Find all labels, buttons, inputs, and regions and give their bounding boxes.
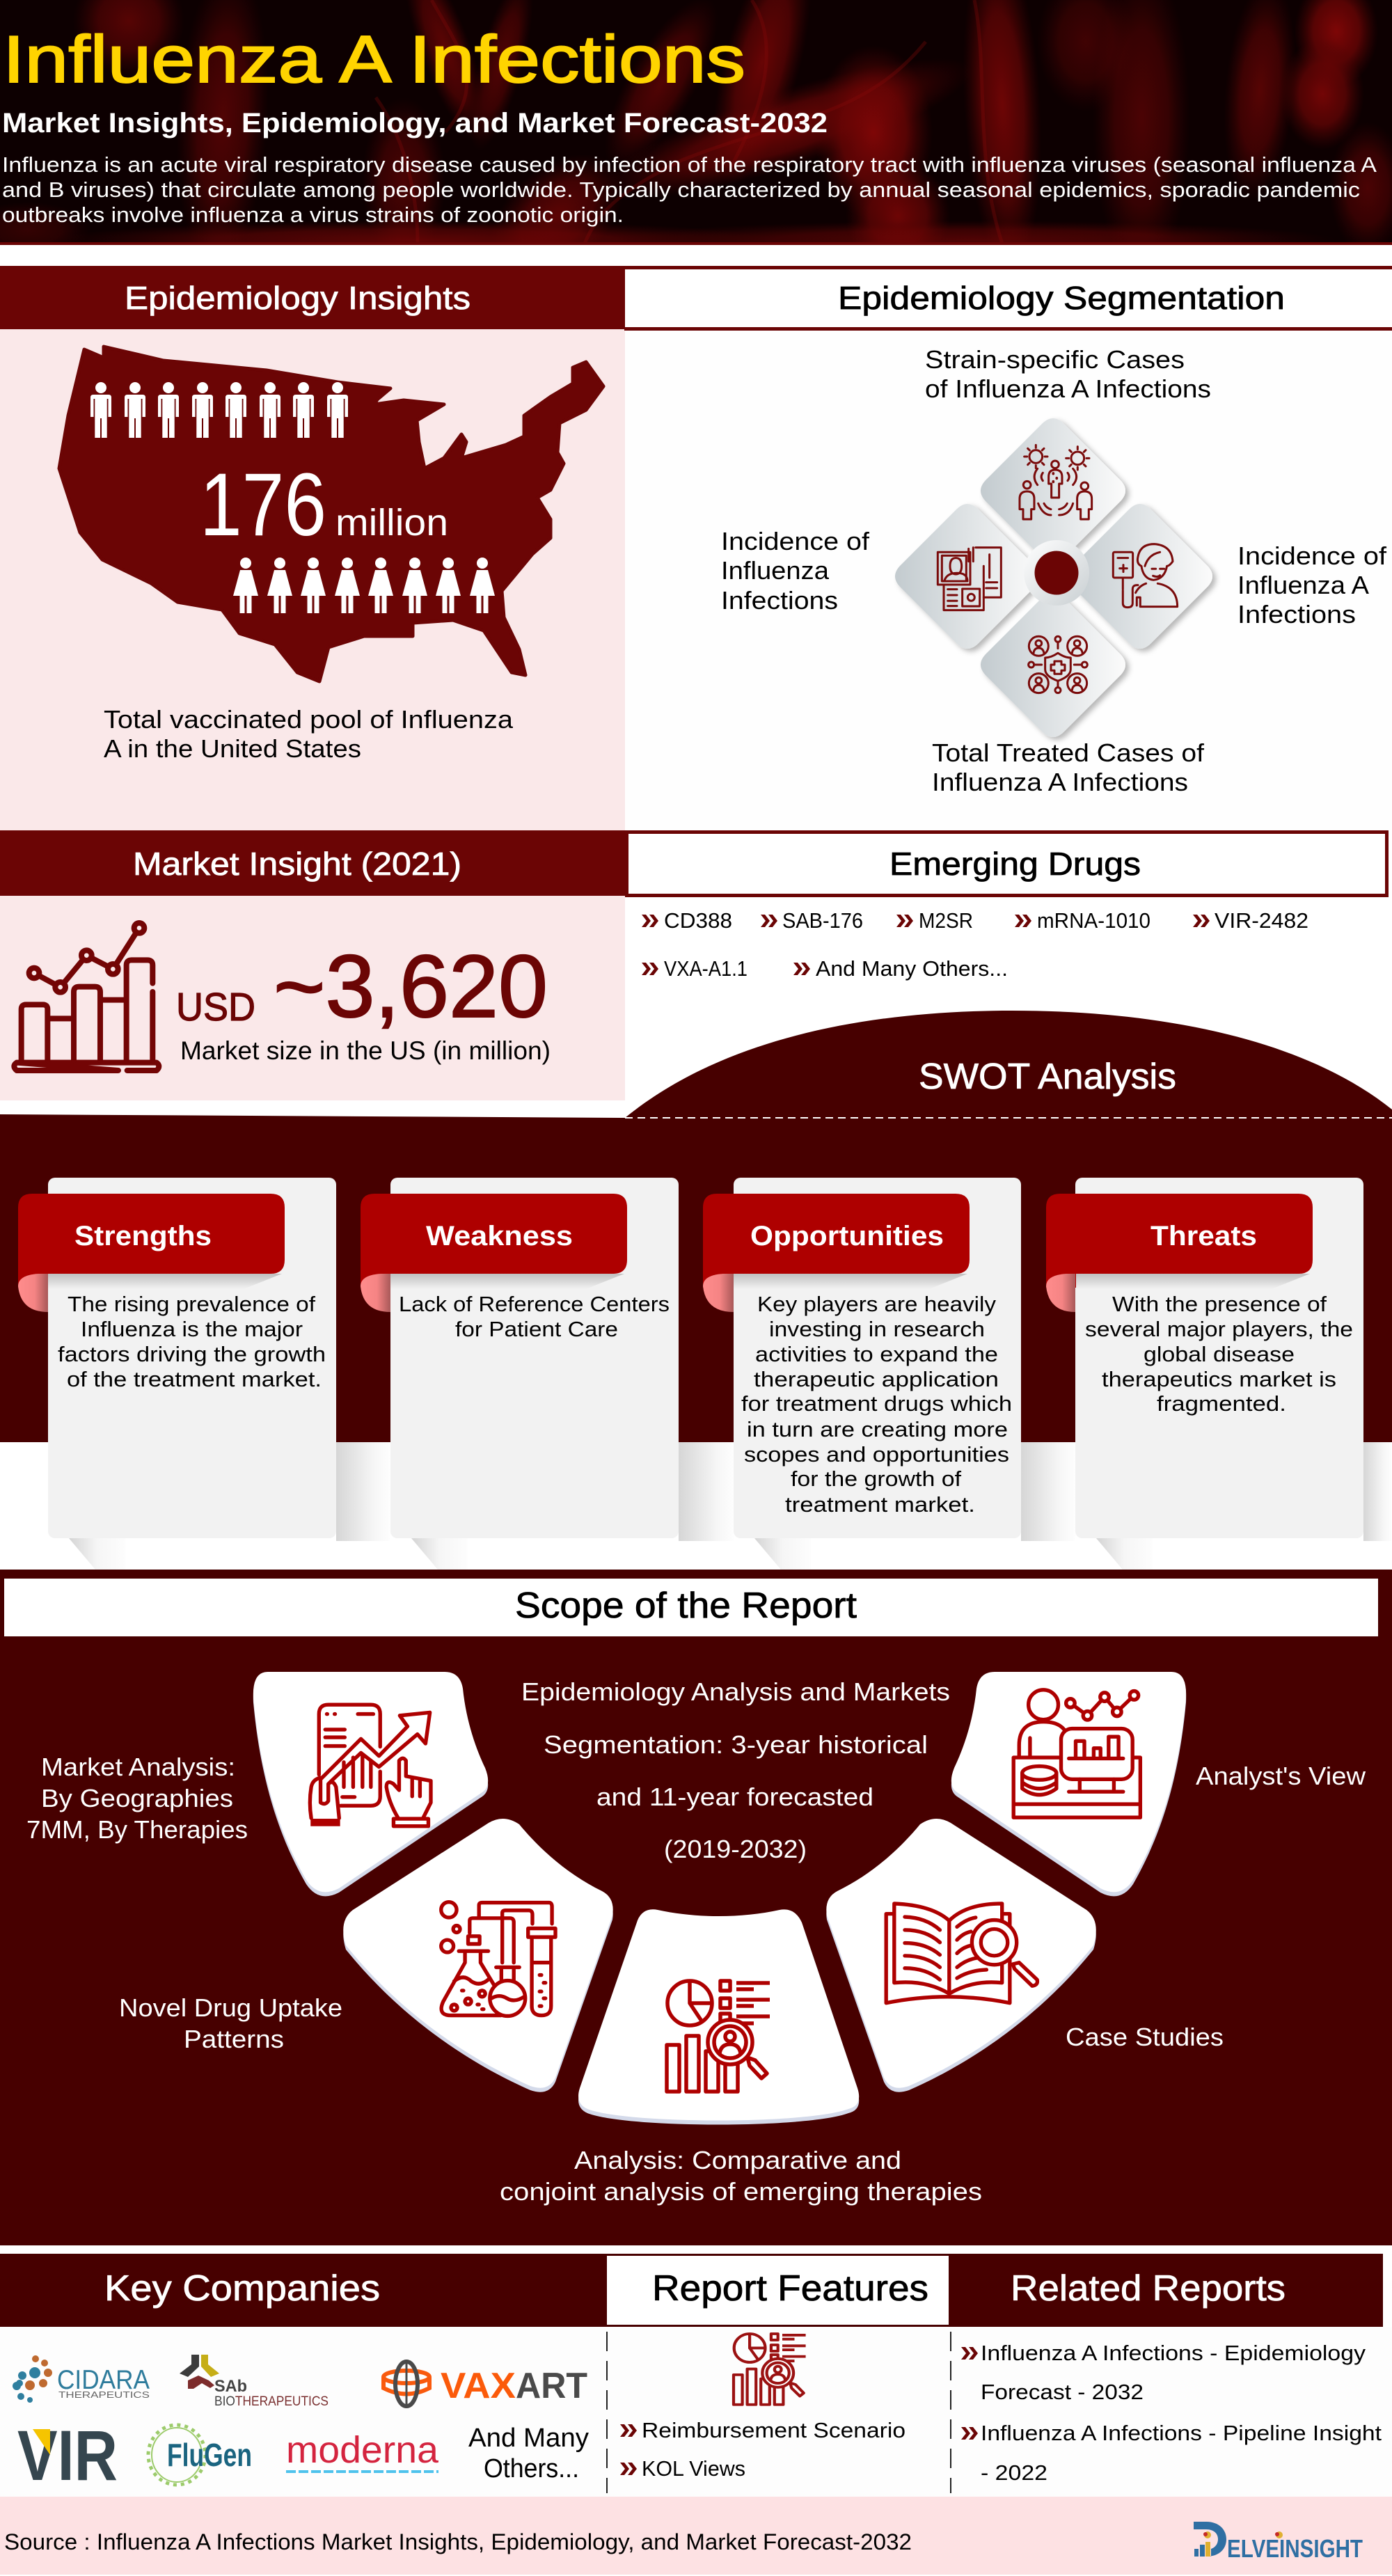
card: strengths: factors driving the growth <box>58 1342 326 1366</box>
center text: Epidemiology Analysis and Markets <box>521 1677 950 1706</box>
panel: bottom section <box>0 2254 1392 2497</box>
panel: SWOT analysis <box>0 1011 1392 1570</box>
report features list: KOL Views <box>642 2456 745 2481</box>
label: market analysis: Market Analysis: <box>41 1753 235 1781</box>
label: comparative analysis: conjoint analysis of emerging therapies <box>500 2177 982 2206</box>
logo: SAb Biotherapeutics <box>180 2355 329 2409</box>
petal: comparative analysis <box>500 1909 982 2206</box>
card: opportunities: investing in research <box>769 1317 985 1341</box>
label: comparative analysis <box>500 2146 982 2206</box>
drug list: M2SR <box>919 908 973 933</box>
heading: Emerging Drugs <box>889 846 1141 882</box>
label: market analysis: By Geographies <box>41 1784 233 1812</box>
logo: FluGen: FluGen <box>167 2437 252 2473</box>
market size caption: Market size in the US (in million) <box>180 1036 551 1065</box>
logo: Moderna: moderna <box>286 2429 439 2471</box>
icon: virus spread <box>1020 445 1092 519</box>
panel: scope of the report <box>0 1570 1392 2245</box>
icon: medical document <box>938 548 1001 610</box>
subtitle: Market Insights, Epidemiology, and Market Forecast-2032 <box>2 108 828 139</box>
people row: women <box>233 558 495 613</box>
report features list: Reimbursement Scenario <box>642 2418 905 2442</box>
heading: Market Insight (2021) <box>133 846 461 882</box>
drug list: VIR-2482 <box>1215 908 1308 933</box>
icon: report features <box>734 2334 806 2405</box>
caption: A in the United States <box>104 734 361 763</box>
logo: DelveInsight: ELVEINSIGHT <box>1227 2534 1363 2563</box>
logo: DelveInsight <box>1194 2522 1363 2563</box>
and many others <box>468 2424 589 2483</box>
US map <box>59 347 603 681</box>
heading: key companies: Key Companies <box>104 2268 380 2309</box>
label: novel drug uptake: Novel Drug Uptake <box>119 1993 342 2022</box>
card: strengths: Influenza is the major <box>81 1317 303 1341</box>
petal: novel drug uptake <box>119 1819 613 2092</box>
logo: Vaxart: VAX <box>441 2366 516 2406</box>
logo: Vir: VIR <box>17 2416 118 2495</box>
label: incidence of influenza A: Incidence of <box>1237 542 1387 570</box>
description paragraph: and B viruses) that circulate among people worldwide. Typically characterized by annual seasonal epidemics, sporadic pandemic <box>2 177 1360 202</box>
statistic 176 million: 176 <box>200 455 326 555</box>
card: threats: several major players, the <box>1085 1317 1353 1341</box>
heading: Scope of the Report <box>515 1586 857 1626</box>
card: weakness: Lack of Reference Centers <box>399 1292 670 1316</box>
logo: Cidara: CIDARA <box>57 2365 150 2395</box>
heading: related reports: Related Reports <box>1011 2268 1286 2309</box>
header banner <box>0 0 1392 245</box>
icon: phone chart hands <box>310 1705 431 1826</box>
card: strengths <box>18 1178 336 1538</box>
center text: (2019-2032) <box>664 1835 807 1863</box>
center text: and 11-year forecasted <box>596 1783 873 1811</box>
caption <box>104 705 514 763</box>
icon: lab flasks <box>441 1902 555 2016</box>
icon: analyst at desk <box>1013 1690 1140 1817</box>
card: strengths: of the treatment market. <box>67 1367 322 1391</box>
center text <box>521 1677 950 1863</box>
heading box <box>626 832 1386 895</box>
and many others: Others... <box>484 2454 579 2483</box>
diamonds <box>895 418 1212 737</box>
card: opportunities: Key players are heavily <box>757 1292 997 1316</box>
description paragraph: outbreaks involve influenza a virus strains of zoonotic origin. <box>2 203 624 227</box>
card: opportunities: in turn are creating more <box>747 1417 1008 1441</box>
people row: men <box>90 382 348 438</box>
label: incidence of influenza: Incidence of <box>721 527 870 555</box>
card: opportunities: scopes and opportunities <box>744 1442 1009 1467</box>
footer <box>0 2497 1392 2575</box>
card: opportunities <box>703 1178 1021 1538</box>
card: threats: global disease <box>1144 1342 1295 1366</box>
panel: epidemiology insights <box>0 266 625 830</box>
drug list: mRNA-1010 <box>1037 908 1150 933</box>
market size value: USD <box>176 985 255 1029</box>
panel: market insight <box>0 830 625 1100</box>
card: strengths: The rising prevalence of <box>68 1292 315 1316</box>
card: weakness: for Patient Care <box>455 1317 618 1341</box>
heading band <box>0 830 625 896</box>
SWOT dark background <box>0 1011 1392 1442</box>
logo: Cidara <box>13 2355 150 2403</box>
icon: treated patients <box>1029 636 1087 693</box>
related reports list <box>961 2341 1382 2485</box>
related reports list: Influenza A Infections - Epidemiology <box>981 2341 1366 2365</box>
drug list: SAB-176 <box>782 908 863 933</box>
statistic 176 million <box>200 455 448 555</box>
label: total treated: Total Treated Cases of <box>932 738 1205 767</box>
petal: case studies <box>826 1819 1224 2092</box>
card: threats: Threats <box>1150 1221 1257 1251</box>
related reports list: Influenza A Infections - Pipeline Insight <box>981 2421 1382 2445</box>
heading box <box>624 267 1392 329</box>
petal: market analysis <box>26 1672 488 1896</box>
heading: report features <box>607 2256 949 2325</box>
icon: bar chart growth <box>14 923 159 1070</box>
logo: SAb Biotherapeutics: SAb <box>214 2377 247 2396</box>
card drop shadows <box>69 1442 1392 1570</box>
center text: Segmentation: 3-year historical <box>544 1730 928 1759</box>
card: weakness: Weakness <box>426 1221 573 1251</box>
label: market analysis: 7MM, By Therapies <box>26 1815 248 1844</box>
label: incidence of influenza <box>721 527 870 615</box>
drug list <box>642 908 1308 981</box>
logo: Vaxart <box>383 2362 587 2406</box>
label: strain-specific: Strain-specific Cases <box>925 345 1185 374</box>
icon: open book with magnifier <box>886 1904 1037 2003</box>
icon: patient with IV <box>1113 544 1178 608</box>
SWOT heading: SWOT Analysis <box>919 1057 1176 1097</box>
panel background <box>625 329 1392 830</box>
diamond cluster <box>895 418 1212 737</box>
label: incidence of influenza: Influenza <box>721 556 830 585</box>
drug list: VXA-A1.1 <box>664 956 748 981</box>
card: opportunities: activities to expand the <box>755 1342 998 1366</box>
card: threats <box>1046 1178 1363 1538</box>
label: strain-specific: of Influenza A Infections <box>925 374 1211 403</box>
label: incidence of influenza A: Influenza A <box>1237 571 1369 599</box>
caption: Total vaccinated pool of Influenza <box>104 705 514 734</box>
banner background texture <box>0 0 1392 245</box>
bottom background <box>0 2327 1392 2497</box>
label: incidence of influenza A <box>1237 542 1387 629</box>
logo: Vaxart: ART <box>516 2366 587 2406</box>
panel background <box>0 896 625 1100</box>
drug list: And Many Others... <box>816 956 1008 981</box>
report features list <box>620 2418 905 2481</box>
logo: FluGen <box>148 2425 252 2485</box>
logo: SAb Biotherapeutics: BIOTHERAPEUTICS <box>214 2394 329 2409</box>
card: opportunities: treatment market. <box>785 1492 975 1517</box>
card: threats: therapeutics market is <box>1102 1367 1336 1391</box>
market size value: ~3,620 <box>274 937 548 1036</box>
center dot <box>1024 540 1089 606</box>
source line: Source : Influenza A Infections Market Insights, Epidemiology, and Market Forecast-2032 <box>4 2529 912 2554</box>
heading: Epidemiology Segmentation <box>838 280 1285 316</box>
label: novel drug uptake: Patterns <box>184 2025 284 2053</box>
card: threats: fragmented. <box>1157 1391 1286 1416</box>
label: analyst's view: Analyst's View <box>1196 1762 1366 1790</box>
card: opportunities: for the growth of <box>791 1467 961 1491</box>
heading: report features: Report Features <box>652 2268 928 2309</box>
logo: Cidara: THERAPEUTICS <box>58 2389 150 2400</box>
heading: Epidemiology Insights <box>125 280 470 316</box>
panel background <box>0 329 625 830</box>
label: total treated: Influenza A Infections <box>932 768 1188 796</box>
heading band <box>0 266 625 329</box>
card: weakness <box>361 1178 679 1538</box>
label: incidence of influenza: Infections <box>721 586 838 615</box>
panel: emerging drugs <box>626 832 1386 981</box>
heading box <box>4 1579 1378 1636</box>
card: opportunities: Opportunities <box>750 1221 944 1251</box>
statistic 176 million: million <box>335 502 448 544</box>
label: market analysis <box>26 1753 248 1844</box>
card: threats: With the presence of <box>1112 1292 1327 1316</box>
label: strain-specific <box>925 345 1211 403</box>
card: opportunities: for treatment drugs which <box>741 1391 1012 1416</box>
title: Influenza A Infections <box>3 22 745 97</box>
drug list: CD388 <box>664 908 732 933</box>
and many others: And Many <box>468 2424 589 2453</box>
card: opportunities: therapeutic application <box>754 1367 999 1391</box>
label: incidence of influenza A: Infections <box>1237 600 1356 629</box>
label: novel drug uptake <box>119 1993 342 2053</box>
label: case studies: Case Studies <box>1066 2023 1224 2051</box>
description paragraph <box>2 152 1377 227</box>
panel: epidemiology segmentation <box>624 267 1392 830</box>
icon: report analysis <box>667 1981 770 2092</box>
related reports list: Forecast - 2032 <box>981 2380 1144 2404</box>
header band <box>0 2254 1383 2327</box>
label: comparative analysis: Analysis: Comparative and <box>574 2146 901 2174</box>
icon set <box>938 445 1178 693</box>
footer background <box>0 2497 1392 2575</box>
petal: analyst's view <box>951 1672 1366 1896</box>
description paragraph: Influenza is an acute viral respiratory disease caused by infection of the respiratory tract with influenza viruses (seasonal influenza A <box>2 152 1377 177</box>
scope background <box>0 1570 1392 2245</box>
card: strengths: Strengths <box>74 1221 212 1251</box>
related reports list: - 2022 <box>981 2460 1047 2485</box>
label: total treated <box>932 738 1205 796</box>
